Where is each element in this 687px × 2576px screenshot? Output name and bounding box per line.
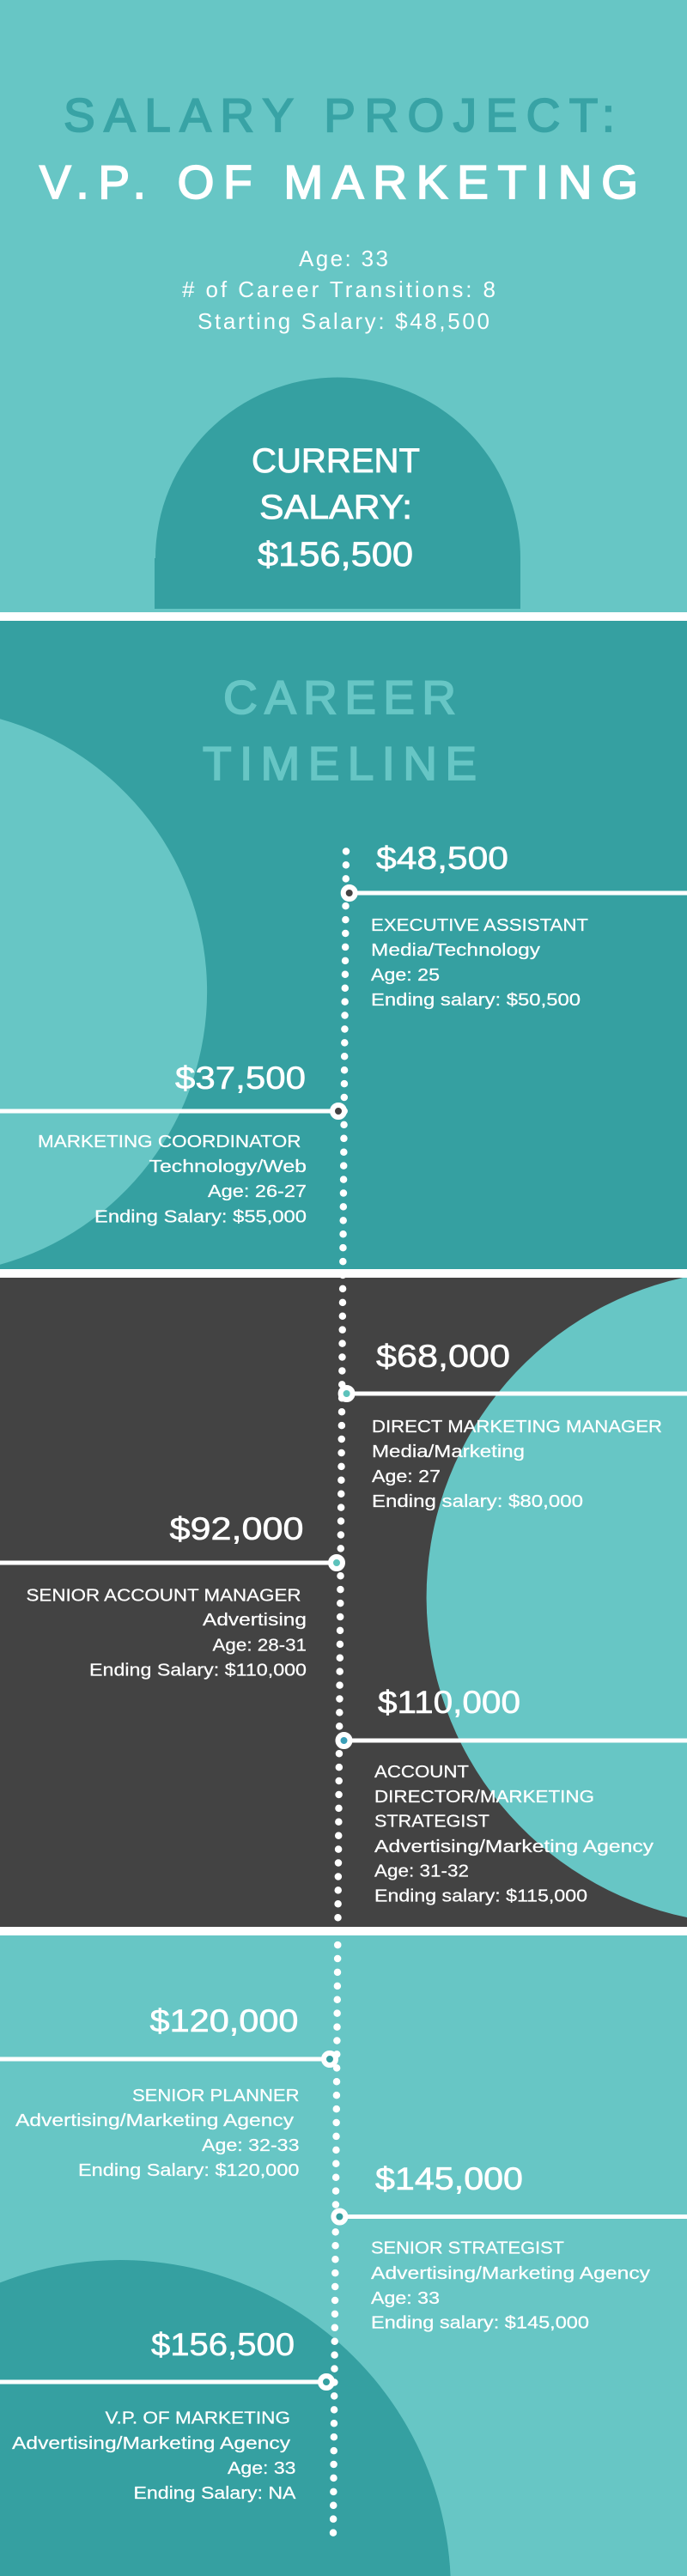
- age: Age: 33: [299, 246, 388, 271]
- connector line: [0, 1109, 338, 1113]
- entry: senior planner: Age: 32-33: [202, 2136, 299, 2155]
- marker: [320, 2376, 332, 2388]
- panel: divider band 1: [0, 612, 687, 621]
- entry: account director / marketing strategist: STRATEGIST: [374, 1812, 489, 1831]
- details: DIRECT MARKETING MANAGER: [372, 1417, 662, 1437]
- title: [40, 88, 638, 209]
- marker: [332, 1105, 344, 1117]
- arch label line 1: CURRENT: [252, 442, 420, 480]
- marker: [338, 1735, 350, 1747]
- details: V.P. OF MARKETING: [105, 2408, 290, 2428]
- entry: senior strategist: [333, 2161, 687, 2332]
- entry: executive assistant: [344, 841, 687, 1010]
- details: SENIOR ACCOUNT MANAGER: [26, 1585, 301, 1606]
- decorative circle: dark section right: [427, 1278, 687, 1917]
- marker: [331, 1557, 343, 1569]
- entry: senior strategist: Ending salary: $145,000: [371, 2313, 589, 2332]
- marker: [333, 2210, 345, 2222]
- connector line: [0, 2380, 326, 2384]
- entry: account director / marketing strategist: Age: 31-32: [374, 1862, 469, 1880]
- entry: v.p. of marketing: Advertising/Marketing Agency: [12, 2433, 291, 2453]
- entry: senior strategist: Age: 33: [371, 2288, 440, 2308]
- entry: marketing coordinator: Ending Salary: $55,000: [94, 1207, 307, 1226]
- entry: v.p. of marketing: Ending Salary: NA: [134, 2483, 296, 2503]
- entry: direct marketing manager: Ending salary: $80,000: [372, 1492, 583, 1511]
- panel: dark section background: [0, 1278, 687, 1927]
- salary: $110,000: [378, 1685, 520, 1720]
- marker: [324, 2053, 336, 2065]
- connector line: [349, 891, 687, 895]
- entry: senior account manager: Advertising: [203, 1610, 307, 1630]
- entry: executive assistant: Age: 25: [371, 965, 440, 985]
- details: EXECUTIVE ASSISTANT: [371, 915, 589, 935]
- entry: marketing coordinator: Technology/Web: [149, 1157, 307, 1176]
- career transitions: # of Career Transitions: 8: [182, 276, 495, 302]
- panel: divider band 2: [0, 1269, 687, 1278]
- entry: account director / marketing strategist: Advertising/Marketing Agency: [374, 1837, 654, 1856]
- heading line 2: TIMELINE: [203, 737, 477, 790]
- salary: $156,500: [151, 2327, 295, 2362]
- heading: career timeline: [203, 671, 477, 790]
- arch label line 3: $156,500: [258, 536, 413, 574]
- connector line: [339, 2215, 687, 2219]
- entry: direct marketing manager: Age: 27: [372, 1467, 441, 1486]
- entry: v.p. of marketing: Age: 33: [228, 2458, 295, 2478]
- entry: senior account manager: [0, 1511, 343, 1680]
- current salary arch: [155, 378, 520, 609]
- salary: $145,000: [375, 2161, 523, 2196]
- arch label line 2: SALARY:: [259, 489, 412, 526]
- entry: senior strategist: Advertising/Marketing Agency: [371, 2263, 651, 2283]
- details: MARKETING COORDINATOR: [38, 1132, 301, 1151]
- entry: executive assistant: Ending salary: $50,500: [371, 990, 581, 1010]
- heading line 1: CAREER: [223, 671, 456, 724]
- entry: direct marketing manager: Media/Marketing: [372, 1442, 525, 1461]
- dotted timeline: [333, 852, 346, 2533]
- summary stats text: [182, 246, 495, 334]
- salary: $48,500: [376, 841, 508, 876]
- connector line: [344, 1738, 687, 1743]
- entry: v.p. of marketing: [0, 2327, 332, 2503]
- panel: divider band 3: [0, 1927, 687, 1935]
- entry: marketing coordinator: [0, 1060, 344, 1226]
- salary: $120,000: [149, 2003, 299, 2038]
- entry: marketing coordinator: Age: 26-27: [208, 1182, 307, 1201]
- salary: $68,000: [376, 1339, 510, 1374]
- details: SENIOR STRATEGIST: [371, 2238, 564, 2258]
- starting salary: Starting Salary: $48,500: [198, 308, 489, 334]
- entry: executive assistant: Media/Technology: [371, 940, 541, 960]
- salary: $37,500: [175, 1060, 306, 1096]
- arch shape: [155, 378, 520, 609]
- entry: senior planner: Advertising/Marketing Agency: [15, 2111, 295, 2130]
- entry: senior account manager: Ending Salary: $110,000: [89, 1661, 307, 1680]
- marker: [341, 1388, 353, 1400]
- panel: career timeline background: [0, 621, 687, 1269]
- decorative circle: bottom left: [0, 2260, 451, 2576]
- connector line: [0, 2057, 330, 2061]
- entry: senior planner: [0, 2003, 336, 2180]
- connector line: [0, 1561, 337, 1564]
- entry: direct marketing manager: [341, 1339, 687, 1511]
- panel: header background: [0, 0, 687, 612]
- entry: senior planner: Ending Salary: $120,000: [78, 2160, 299, 2180]
- connector line: [347, 1391, 687, 1396]
- entry: account director / marketing strategist: DIRECTOR/MARKETING: [374, 1787, 594, 1807]
- decorative circle: timeline left: [0, 719, 207, 1265]
- title line 2: V.P. OF MARKETING: [40, 155, 638, 209]
- details: SENIOR PLANNER: [132, 2086, 299, 2105]
- entry: senior account manager: Age: 28-31: [213, 1635, 307, 1656]
- entry: account director / marketing strategist: [338, 1685, 687, 1906]
- marker: [344, 887, 356, 899]
- salary: $92,000: [170, 1511, 304, 1546]
- details: ACCOUNT: [374, 1762, 470, 1782]
- panel: light section background: [0, 1935, 687, 2576]
- entry: account director / marketing strategist: Ending salary: $115,000: [374, 1886, 587, 1906]
- title line 1: SALARY PROJECT:: [64, 88, 615, 142]
